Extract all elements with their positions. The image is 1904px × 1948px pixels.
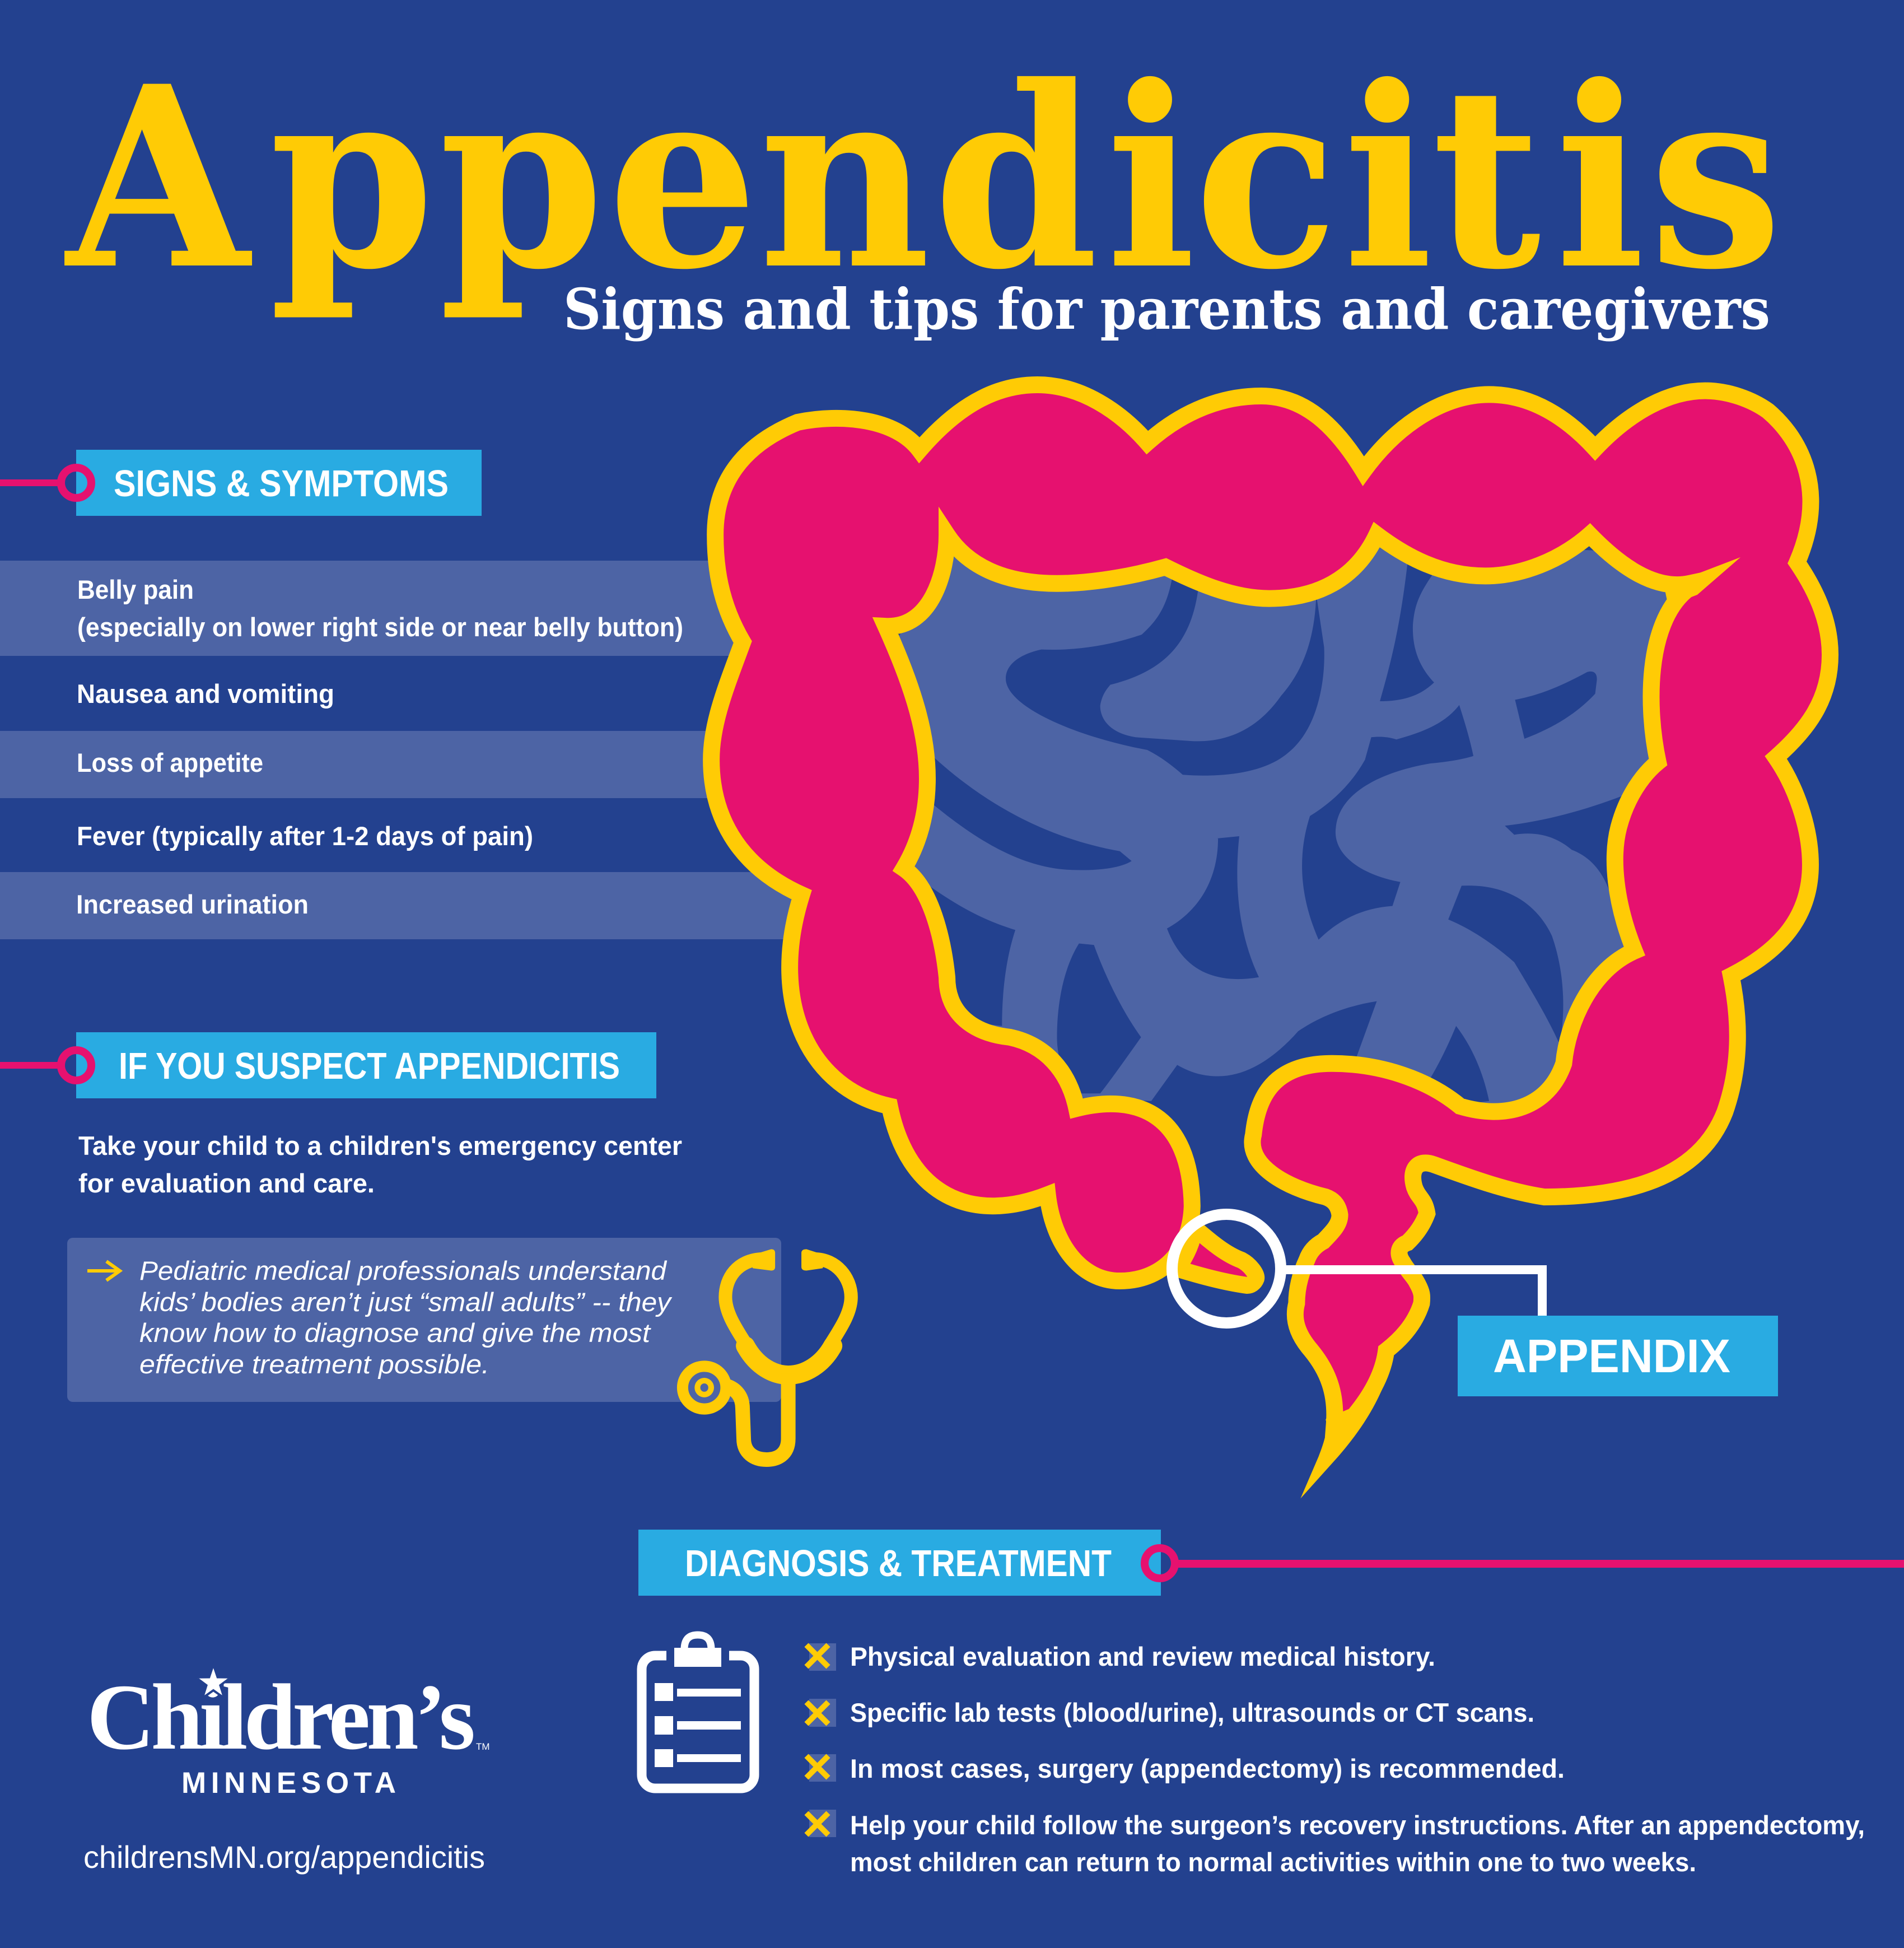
symptom row: appetite — [0, 731, 840, 798]
list item: recovery: most children can return to normal activities within one to two weeks. — [850, 1847, 1696, 1877]
signs heading — [0, 450, 482, 516]
suspect advice — [78, 1131, 682, 1198]
suspect heading: IF YOU SUSPECT APPENDICITIS — [119, 1045, 620, 1087]
callout: pediatric professionals: kids’ bodies aren’t just “small adults” -- they — [139, 1287, 673, 1317]
callout: pediatric professionals: effective treatment possible. — [139, 1349, 489, 1379]
suspect advice: Take your child to a children's emergency center — [78, 1131, 682, 1161]
symptom row: urination: Increased urination — [76, 889, 309, 919]
panel: diagnosis and treatment — [638, 1530, 1904, 1877]
logo: Children's Minnesota: Children’s — [87, 1665, 475, 1769]
logo: Children's Minnesota: TM — [476, 1741, 490, 1752]
list item: recovery — [806, 1810, 1865, 1877]
panel: if you suspect appendicitis — [0, 1032, 851, 1460]
callout: pediatric professionals — [67, 1238, 781, 1402]
symptom row: fever: Fever (typically after 1-2 days of pain) — [77, 821, 533, 851]
callout: pediatric professionals: know how to diagnose and give the most — [139, 1318, 651, 1348]
symptom row: belly pain: (especially on lower right side or near belly button) — [77, 612, 683, 642]
list item: recovery: Help your child follow the surgeon’s recovery instructions. After an appendectomy, — [850, 1810, 1865, 1840]
panel: signs and symptoms — [0, 450, 840, 939]
callout: appendix label — [1172, 1214, 1778, 1396]
diagnosis heading — [638, 1530, 1904, 1596]
icon: clipboard — [642, 1635, 754, 1788]
icon: stethoscope — [683, 1249, 851, 1460]
symptom row: belly pain: Belly pain — [77, 575, 194, 604]
diagnosis heading: DIAGNOSIS & TREATMENT — [685, 1542, 1112, 1585]
symptom row: appetite: Loss of appetite — [77, 748, 263, 777]
callout: appendix label: APPENDIX — [1493, 1330, 1730, 1382]
symptom row: belly pain — [0, 561, 840, 656]
list item: lab tests: Specific lab tests (blood/urine), ultrasounds or CT scans. — [850, 1698, 1534, 1727]
title: Appendicitis — [63, 32, 1782, 325]
illustration: small intestine — [892, 520, 1740, 1112]
signs heading: SIGNS & SYMPTOMS — [114, 463, 449, 505]
subtitle: Signs and tips for parents and caregivers — [563, 276, 1770, 342]
illustration: large intestine — [711, 385, 1830, 1498]
illustration: appendix — [1177, 1228, 1256, 1285]
symptom row: urination — [0, 872, 840, 939]
suspect advice: for evaluation and care. — [78, 1168, 375, 1198]
suspect heading — [0, 1032, 656, 1098]
website url: childrensMN.org/appendicitis — [83, 1839, 485, 1875]
symptom row: nausea: Nausea and vomiting — [77, 679, 334, 709]
callout: pediatric professionals: Pediatric medical professionals understand — [139, 1256, 668, 1285]
list item: surgery: In most cases, surgery (appendectomy) is recommended. — [850, 1754, 1565, 1783]
logo: Children's Minnesota: MINNESOTA — [181, 1767, 396, 1800]
list item: physical evaluation: Physical evaluation and review medical history. — [850, 1642, 1435, 1671]
